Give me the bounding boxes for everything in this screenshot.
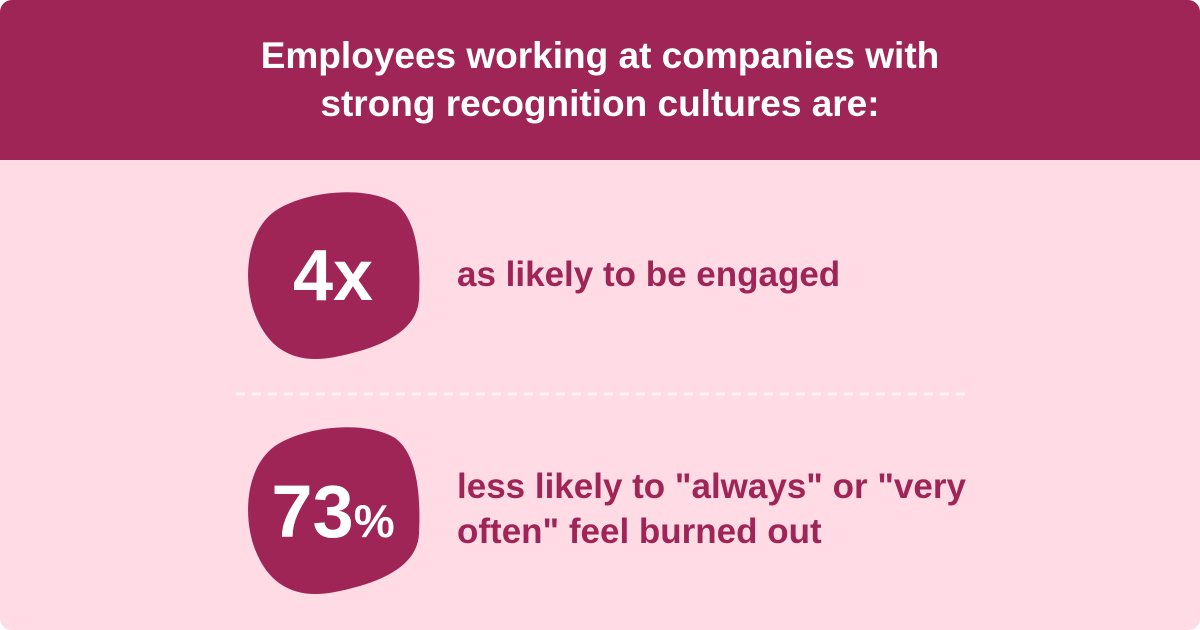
stat number: 73%: 73%: [271, 470, 395, 553]
stat number: 4x: 4x: [293, 236, 373, 316]
title: [261, 35, 939, 124]
stat text 1: as likely to be engaged: [457, 255, 840, 294]
stat text 2: [457, 467, 966, 551]
title: strong recognition cultures are:: [320, 83, 880, 124]
stat text 2: less likely to "always" or "very: [457, 467, 966, 506]
stat text 2: often" feel burned out: [457, 512, 822, 551]
dashed divider: [236, 392, 965, 396]
stat blob 2: [248, 427, 420, 594]
stat blob 1: [248, 192, 420, 359]
title: Employees working at companies with: [261, 35, 939, 76]
header band: [0, 0, 1200, 160]
